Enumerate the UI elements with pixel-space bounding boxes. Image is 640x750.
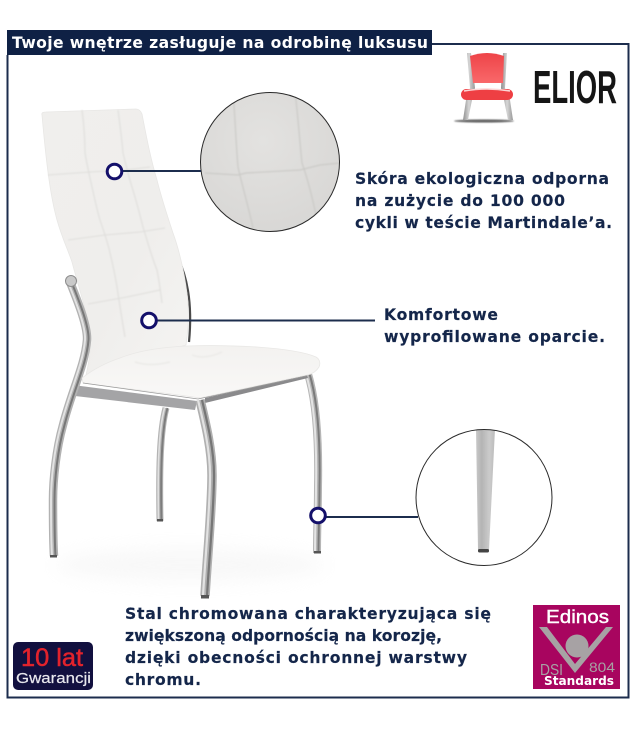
callout text: leather: Skóra ekologiczna odporna [355,170,609,188]
callout line 2 [157,320,375,322]
badge: Edinos standards: 804 [589,659,615,675]
backrest [42,109,188,375]
callout text: backrest: wyprofilowane oparcie. [384,328,605,346]
logo: Elior [454,53,617,123]
left rear upright [51,282,89,556]
callout text: backrest [384,306,605,346]
title: Twoje wnętrze zasługuje na odrobinę luksusu [12,34,428,52]
backrest edge [178,258,190,342]
detail circle: leg [416,429,552,566]
seat [82,346,320,398]
text block: chrome steel: Stal chromowana charakteryzująca się [125,605,491,623]
right rear leg [306,374,320,553]
text block: chrome steel: dzięki obecności ochronnej warstwy [125,649,467,667]
detail circle: leather [200,92,340,232]
text block: chrome steel [125,605,491,689]
callout text: backrest: Komfortowe [384,306,498,324]
frame bars [73,385,197,410]
chair photo [42,109,321,598]
badge: Edinos standards: Standards [544,674,614,688]
floor shadow [55,549,325,581]
badge: Edinos standards [533,605,620,689]
back rear leg [158,408,168,521]
icon: red chair [454,53,514,123]
callout text: leather: na zużycie do 100 000 [355,192,565,210]
badge: 10 years warranty [13,642,93,690]
text block: chrome steel: zwiększoną odpornością na korozję, [125,627,442,645]
marker 1 [107,164,122,179]
callout text: leather: cykli w teście Martindale’a. [355,214,612,232]
backrest seams [48,110,165,337]
badge: 10 years warranty: Gwarancji [16,671,91,687]
badge: 10 years warranty: 10 lat [21,644,83,672]
callout line 3 [326,516,418,518]
marker 2 [142,313,156,328]
text block: chrome steel: chromu. [125,671,201,689]
callout text: leather [355,170,612,232]
badge: Edinos standards: Edinos [546,607,609,627]
marker 3 [311,508,325,523]
badge: Edinos standards: DSI [540,662,563,679]
callout line 1 [122,170,201,172]
front leg [198,400,214,596]
seat tufts [135,352,222,364]
